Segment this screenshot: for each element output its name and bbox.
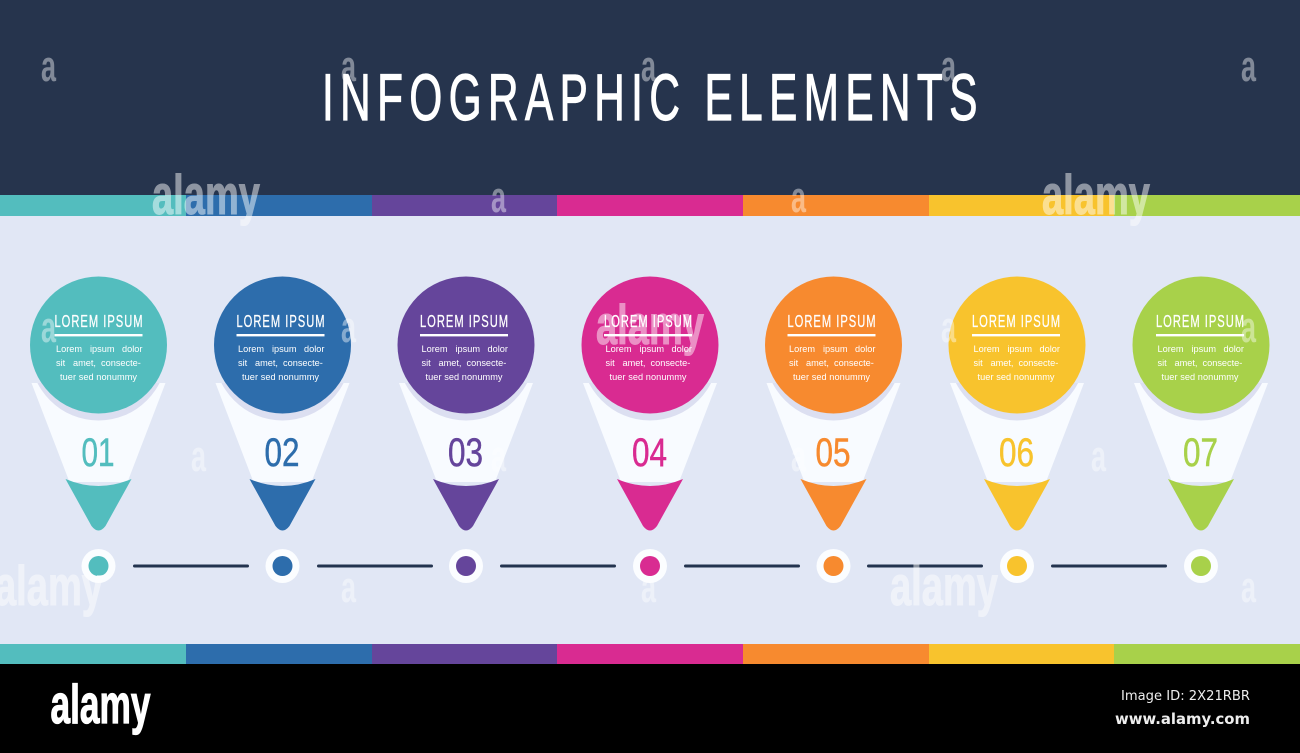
- circle shadow: [589, 383, 711, 420]
- body text: Lorem: [606, 344, 632, 354]
- body text: sit: [974, 358, 983, 368]
- body text: [789, 344, 875, 382]
- watermarks: alamy: [1042, 163, 1150, 226]
- watermarks: a: [641, 42, 656, 91]
- step 01: [30, 276, 167, 583]
- heading: LOREM IPSUM: [604, 311, 692, 332]
- connector 1: [133, 564, 249, 568]
- watermarks: a: [341, 303, 356, 352]
- arrow: [433, 479, 499, 530]
- footer url: www.alamy.com: [1115, 710, 1250, 728]
- marker: [1184, 549, 1218, 583]
- body text: ipsum: [272, 344, 297, 354]
- heading: LOREM IPSUM: [236, 311, 325, 332]
- watermarks: a: [491, 432, 506, 481]
- step 05: [765, 276, 902, 583]
- top colour strip: [0, 195, 1300, 216]
- circle: [30, 276, 167, 414]
- cone: [399, 383, 533, 482]
- heading: LOREM IPSUM: [1156, 311, 1244, 332]
- watermarks: a: [941, 42, 956, 91]
- watermarks: a: [341, 563, 356, 612]
- heading: LOREM IPSUM: [972, 311, 1060, 332]
- body text: Lorem: [1158, 344, 1184, 354]
- cone: [766, 383, 900, 482]
- body text: tuer sed nonummy: [426, 372, 503, 382]
- body text: [1158, 344, 1244, 382]
- cone: [1134, 383, 1268, 482]
- watermarks: alamy: [890, 554, 998, 617]
- watermarks: a: [1091, 432, 1106, 481]
- arrow: [800, 479, 866, 530]
- body text: amet,: [990, 358, 1013, 368]
- watermarks: a: [491, 173, 506, 222]
- body text: Lorem: [238, 344, 264, 354]
- footer logo: alamy: [50, 673, 151, 735]
- heading: LOREM IPSUM: [54, 311, 143, 332]
- body text: consecte-: [466, 358, 506, 368]
- body text: [606, 344, 692, 382]
- circle shadow: [1140, 383, 1262, 420]
- body text: dolor: [1224, 344, 1244, 354]
- heading rule: [420, 334, 508, 336]
- body text: sit: [56, 358, 66, 368]
- step 03: [398, 276, 534, 583]
- image id: Image ID: 2X21RBR: [1121, 688, 1250, 704]
- cone: [950, 383, 1084, 482]
- circle: [765, 276, 902, 414]
- number: 04: [632, 431, 667, 475]
- body text: sit: [238, 358, 248, 368]
- arrow: [1168, 479, 1234, 530]
- body text: amet,: [806, 358, 829, 368]
- body text: [422, 344, 508, 382]
- body text: [974, 344, 1060, 382]
- watermarks: a: [191, 432, 206, 481]
- body text: consecte-: [283, 358, 323, 368]
- circle: [582, 276, 718, 414]
- body text: tuer sed nonummy: [242, 372, 319, 382]
- body text: [56, 344, 142, 382]
- body text: dolor: [1040, 344, 1060, 354]
- heading rule: [972, 334, 1060, 336]
- watermarks: a: [791, 173, 806, 222]
- number: 01: [82, 431, 114, 475]
- number: 07: [1183, 431, 1218, 475]
- marker: [816, 549, 850, 583]
- watermarks: a: [941, 303, 956, 352]
- body text: amet,: [1174, 358, 1197, 368]
- body text: sit: [1158, 358, 1167, 368]
- number: 03: [448, 431, 483, 475]
- circle shadow: [772, 383, 894, 420]
- body text: tuer sed nonummy: [978, 372, 1055, 382]
- bottom colour strip: [0, 644, 1300, 664]
- marker: [449, 549, 483, 583]
- heading: LOREM IPSUM: [420, 311, 508, 332]
- body text: amet,: [73, 358, 96, 368]
- circle: [1132, 276, 1270, 414]
- circle: [398, 276, 534, 414]
- body text: tuer sed nonummy: [60, 372, 137, 382]
- body text: consecte-: [1018, 358, 1058, 368]
- heading rule: [604, 334, 692, 336]
- body text: ipsum: [823, 344, 848, 354]
- step 07: [1132, 276, 1270, 583]
- title: INFOGRAPHIC ELEMENTS: [322, 60, 977, 134]
- step 04: [582, 276, 718, 583]
- body text: amet,: [622, 358, 645, 368]
- marker: [633, 549, 667, 583]
- number: 02: [264, 431, 300, 475]
- body text: Lorem: [974, 344, 1000, 354]
- footer bar: [0, 664, 1300, 753]
- circle: [948, 276, 1086, 414]
- arrow: [66, 479, 132, 530]
- number: 05: [816, 431, 850, 475]
- arrow: [984, 479, 1050, 530]
- body text: dolor: [488, 344, 508, 354]
- number: 06: [999, 431, 1034, 475]
- watermarks: a: [1241, 303, 1256, 352]
- marker: [82, 549, 116, 583]
- header band: [0, 0, 1300, 195]
- body text: sit: [606, 358, 615, 368]
- marker: [1000, 549, 1034, 583]
- circle shadow: [38, 383, 160, 420]
- heading: LOREM IPSUM: [788, 311, 876, 332]
- connector 6: [1051, 564, 1167, 568]
- body text: consecte-: [650, 358, 690, 368]
- heading rule: [1156, 334, 1244, 336]
- watermarks: a: [1241, 42, 1256, 91]
- body text: dolor: [672, 344, 692, 354]
- body text: consecte-: [834, 358, 874, 368]
- connector 2: [317, 564, 433, 568]
- cone: [583, 383, 717, 482]
- connector 4: [684, 564, 800, 568]
- circle shadow: [222, 383, 344, 420]
- body text: dolor: [304, 344, 324, 354]
- body text: Lorem: [56, 344, 82, 354]
- body text: consecte-: [101, 358, 141, 368]
- body text: ipsum: [1008, 344, 1032, 354]
- heading rule: [788, 334, 876, 336]
- connector 5: [867, 564, 983, 568]
- body text: [238, 344, 324, 382]
- arrow: [617, 479, 683, 530]
- watermarks: a: [41, 303, 56, 352]
- body text: sit: [422, 358, 431, 368]
- watermarks: a: [791, 432, 806, 481]
- cone: [216, 383, 350, 482]
- watermarks: alamy: [596, 293, 704, 356]
- connector 3: [500, 564, 616, 568]
- circle shadow: [405, 383, 527, 420]
- body text: sit: [789, 358, 799, 368]
- body text: Lorem: [422, 344, 448, 354]
- watermarks: a: [341, 42, 356, 91]
- body text: dolor: [855, 344, 875, 354]
- body text: dolor: [122, 344, 142, 354]
- body text: consecte-: [1202, 358, 1242, 368]
- page background: [0, 216, 1300, 644]
- body text: ipsum: [456, 344, 480, 354]
- body text: amet,: [438, 358, 461, 368]
- heading rule: [236, 334, 324, 336]
- circle shadow: [956, 383, 1078, 420]
- body text: tuer sed nonummy: [793, 372, 870, 382]
- cone: [32, 383, 166, 482]
- step 02: [214, 276, 351, 583]
- watermarks: a: [1241, 563, 1256, 612]
- body text: tuer sed nonummy: [610, 372, 687, 382]
- watermarks: [0, 42, 1256, 617]
- body text: ipsum: [1192, 344, 1216, 354]
- watermarks: a: [641, 563, 656, 612]
- body text: ipsum: [90, 344, 115, 354]
- heading rule: [54, 334, 142, 336]
- body text: ipsum: [640, 344, 664, 354]
- watermarks: a: [41, 42, 56, 91]
- body text: tuer sed nonummy: [1162, 372, 1239, 382]
- body text: Lorem: [789, 344, 815, 354]
- circle: [214, 276, 351, 414]
- step 06: [948, 276, 1086, 583]
- marker: [266, 549, 300, 583]
- watermarks: alamy: [152, 163, 260, 226]
- arrow: [250, 479, 316, 530]
- body text: amet,: [255, 358, 278, 368]
